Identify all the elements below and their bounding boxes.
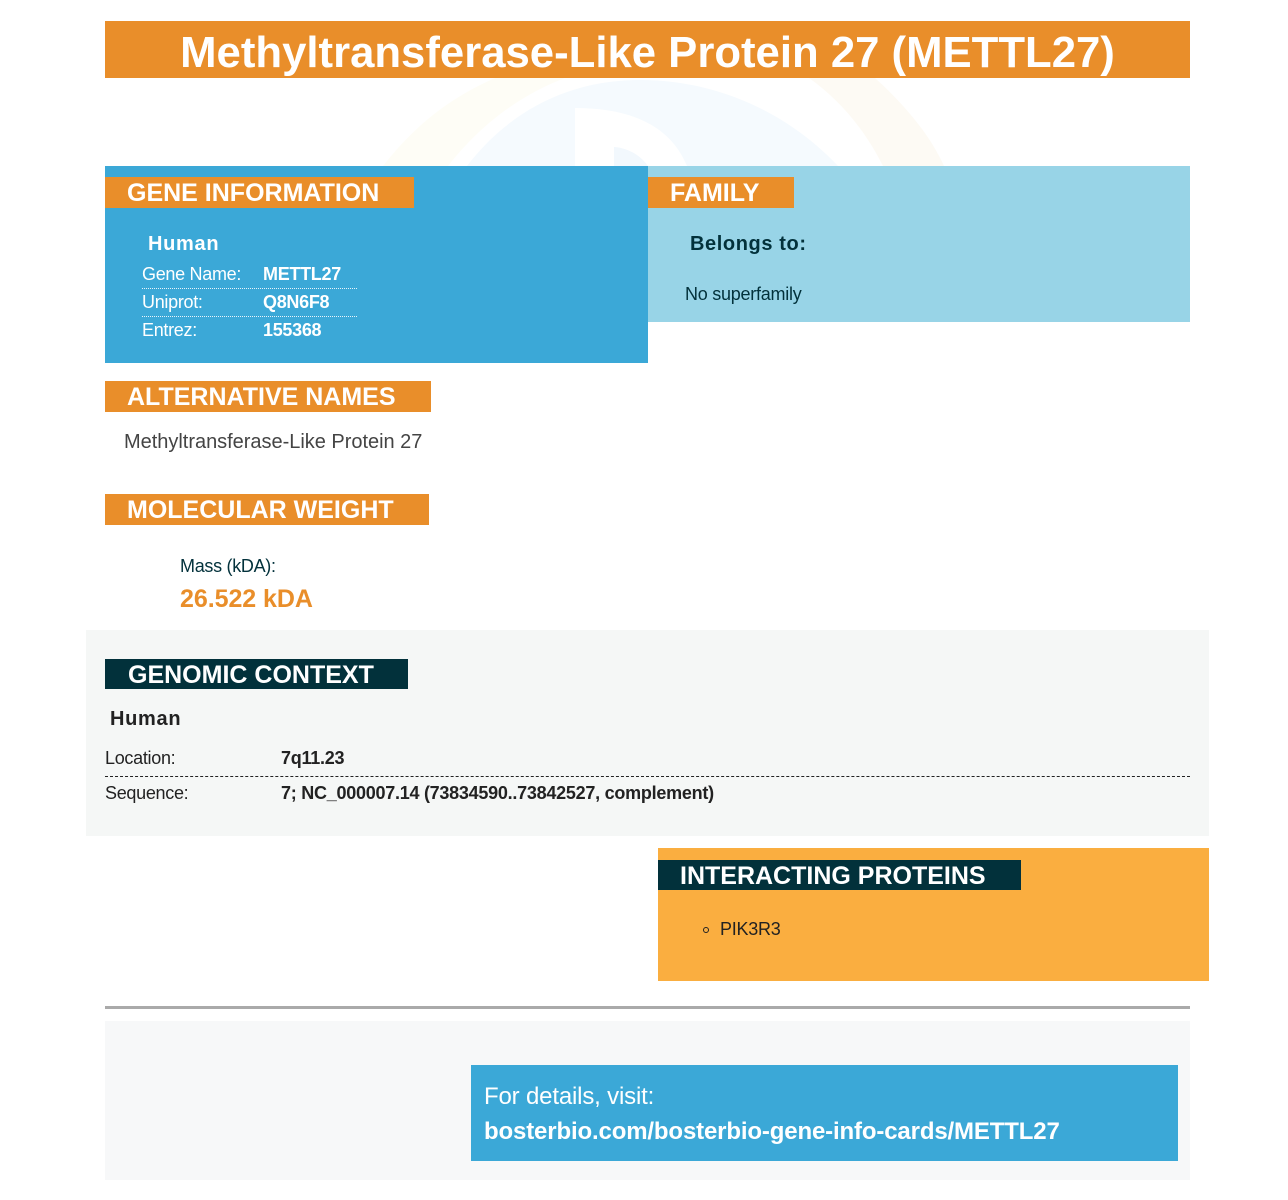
divider bbox=[105, 1006, 1190, 1009]
title: Methyltransferase-Like Protein 27 (METTL27) bbox=[180, 28, 1115, 77]
row: uniprot: Uniprot: bbox=[142, 292, 203, 312]
label: belongs to: Belongs to: bbox=[690, 233, 807, 255]
row: entrez: 155368 bbox=[263, 320, 321, 340]
row: gene name: METTL27 bbox=[263, 264, 341, 284]
list bullet bbox=[703, 927, 709, 933]
heading: genomic context: GENOMIC CONTEXT bbox=[128, 661, 374, 689]
panel: family bbox=[648, 166, 1190, 322]
text: superfamily: No superfamily bbox=[685, 284, 802, 304]
heading: interacting proteins: INTERACTING PROTEINS bbox=[680, 862, 986, 890]
row: gene name bbox=[142, 264, 357, 289]
row: sequence: 7; NC_000007.14 (73834590..73842527, complement) bbox=[281, 783, 714, 803]
heading: gene information: GENE INFORMATION bbox=[127, 179, 379, 207]
heading: alternative names: ALTERNATIVE NAMES bbox=[127, 383, 396, 411]
panel: interacting proteins bbox=[658, 848, 1209, 981]
species label: human: Human bbox=[110, 708, 181, 730]
species label: human: Human bbox=[148, 233, 219, 255]
heading: molecular weight: MOLECULAR WEIGHT bbox=[127, 496, 394, 524]
panel: gene information bbox=[105, 166, 648, 363]
row: location: 7q11.23 bbox=[281, 748, 344, 768]
row: gene name: Gene Name: bbox=[142, 264, 241, 284]
heading: family bbox=[648, 177, 794, 208]
row: location: Location: bbox=[105, 748, 175, 768]
row: entrez bbox=[142, 320, 321, 340]
heading: family: FAMILY bbox=[670, 179, 759, 207]
row: uniprot bbox=[142, 291, 357, 317]
row: sequence: Sequence: bbox=[105, 783, 188, 803]
label: mass: Mass (kDA): bbox=[180, 556, 276, 576]
text: for details: For details, visit: bbox=[484, 1083, 654, 1110]
panel: footer bbox=[105, 1021, 1190, 1180]
list item: PIK3R3: PIK3R3 bbox=[720, 919, 781, 939]
panel: genomic context bbox=[86, 630, 1209, 836]
callout: details link bbox=[471, 1065, 1178, 1161]
text: url: bosterbio.com/bosterbio-gene-info-cards/METTL27 bbox=[484, 1118, 1060, 1145]
watermark logo bbox=[384, 78, 944, 166]
row: uniprot: Q8N6F8 bbox=[263, 292, 329, 312]
row: location bbox=[105, 746, 1190, 777]
row: entrez: Entrez: bbox=[142, 320, 197, 340]
text: alternative names: Methyltransferase-Like Protein 27 bbox=[124, 431, 422, 453]
value: mass: 26.522 kDA bbox=[180, 585, 313, 613]
